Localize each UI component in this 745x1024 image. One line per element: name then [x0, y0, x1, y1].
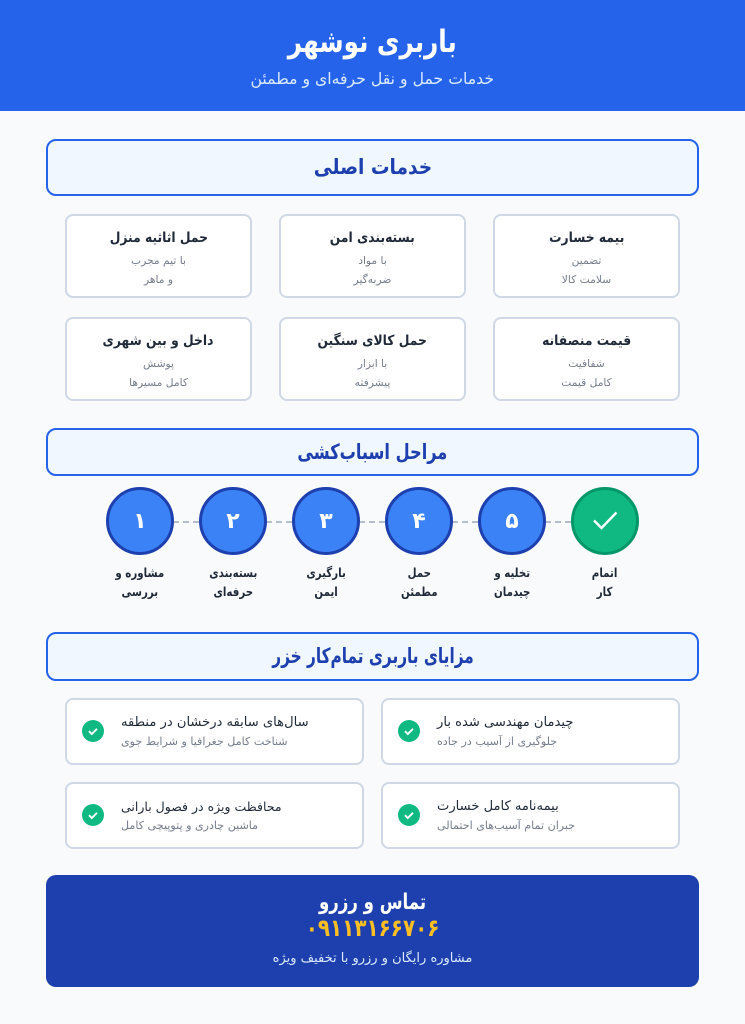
step 3 — [292, 487, 360, 555]
step 1: ۱ — [133, 509, 147, 534]
header banner — [0, 0, 745, 111]
service card: home furniture: با تیم مجرب — [131, 254, 186, 267]
feature: rain protection — [65, 782, 364, 849]
panel: services grid — [65, 214, 680, 401]
step 5 label: چیدمان — [494, 584, 530, 599]
step 4 — [385, 487, 453, 555]
service card: fair price: قیمت منصفانه — [542, 333, 631, 349]
step 3 label — [306, 565, 346, 599]
feature: rain protection: ماشین چادری و پتوپیچی کامل — [121, 819, 258, 832]
service card: safe packing — [279, 214, 466, 298]
service card: intercity — [65, 317, 252, 401]
step 2 label: حرفه‌ای — [213, 584, 253, 599]
process flow — [106, 487, 639, 599]
step 2 — [199, 487, 267, 555]
phone number: ۰۹۱۱۳۱۶۶۷۰۶ — [306, 914, 439, 942]
feature: years of experience: شناخت کامل جغرافیا و شرایط جوی — [121, 735, 288, 748]
title: باربری نوشهر — [288, 24, 457, 60]
service card: fair price: شفافیت — [568, 357, 605, 370]
service card: damage insurance: تضمین — [572, 254, 601, 267]
step 1 — [106, 487, 174, 555]
step done: check icon — [571, 487, 639, 555]
feature: full insurance — [381, 782, 680, 849]
contact note: مشاوره رایگان و رزرو با تخفیف ویژه — [273, 951, 472, 966]
step 2 label — [209, 565, 257, 599]
step 4: ۴ — [412, 509, 426, 534]
feature: engineered load — [381, 698, 680, 765]
step 5 label — [494, 565, 530, 599]
service card: home furniture: و ماهر — [144, 273, 173, 286]
service card: heavy goods: حمل کالای سنگین — [318, 333, 427, 349]
service card: fair price: کامل قیمت — [561, 376, 612, 389]
service card: heavy goods — [279, 317, 466, 401]
feature: engineered load: چیدمان مهندسی شده بار — [437, 715, 573, 730]
feature: years of experience — [65, 698, 364, 765]
service card: home furniture — [65, 214, 252, 298]
service card: intercity: پوشش — [143, 357, 174, 370]
service card: heavy goods: با ابزار — [358, 357, 387, 370]
step 4 label: حمل — [407, 565, 431, 580]
heading: moving steps — [46, 428, 699, 476]
step 2 label: بسته‌بندی — [209, 565, 257, 580]
step 1 label: بررسی — [122, 584, 158, 599]
feature: rain protection: محافظت ویژه در فصول بارانی — [121, 799, 282, 814]
heading: main services: خدمات اصلی — [313, 155, 432, 179]
heading: moving steps: مراحل اسباب‌کشی — [298, 440, 447, 464]
service card: safe packing: ضربه‌گیر — [354, 273, 391, 286]
step 5 — [478, 487, 546, 555]
heading: main services — [46, 139, 699, 196]
feature: engineered load: جلوگیری از آسیب در جاده — [437, 735, 557, 748]
step 4 label — [401, 565, 437, 599]
heading: advantages: مزایای باربری تمام‌کار خزر — [272, 644, 473, 668]
step 6 label: کار — [597, 584, 613, 599]
step 5 label: تخلیه و — [494, 565, 530, 580]
service card: damage insurance: سلامت کالا — [562, 273, 611, 286]
step 4 label: مطمئن — [401, 584, 437, 599]
step 2: ۲ — [226, 509, 240, 534]
step 6 label: اتمام — [592, 565, 618, 580]
feature: full insurance: بیمه‌نامه کامل خسارت — [437, 799, 559, 814]
step 3 label: ایمن — [314, 584, 338, 599]
step 3 label: بارگیری — [306, 565, 346, 580]
feature: years of experience: سال‌های سابقه درخشان در منطقه — [121, 715, 309, 730]
contact panel — [46, 875, 699, 987]
heading: advantages — [46, 632, 699, 681]
step 1 label — [114, 565, 164, 599]
service card: intercity: کامل مسیرها — [129, 376, 188, 389]
subtitle: خدمات حمل و نقل حرفه‌ای و مطمئن — [251, 69, 494, 88]
step 1 label: مشاوره و — [116, 565, 164, 580]
panel: advantages grid — [65, 698, 680, 849]
step 6 label — [592, 565, 618, 599]
feature: full insurance: جبران تمام آسیب‌های احتمالی — [437, 819, 575, 832]
service card: fair price — [493, 317, 680, 401]
service card: home furniture: حمل اثاثیه منزل — [109, 230, 208, 246]
step 3: ۳ — [319, 509, 333, 534]
contact heading: تماس و رزرو — [319, 890, 426, 915]
service card: damage insurance: بیمه خسارت — [549, 230, 624, 246]
service card: heavy goods: پیشرفته — [355, 376, 390, 389]
service card: safe packing: بسته‌بندی امن — [330, 230, 415, 246]
service card: damage insurance — [493, 214, 680, 298]
service card: intercity: داخل و بین شهری — [103, 333, 214, 349]
service card: safe packing: با مواد — [358, 254, 387, 267]
step 5: ۵ — [505, 509, 519, 534]
